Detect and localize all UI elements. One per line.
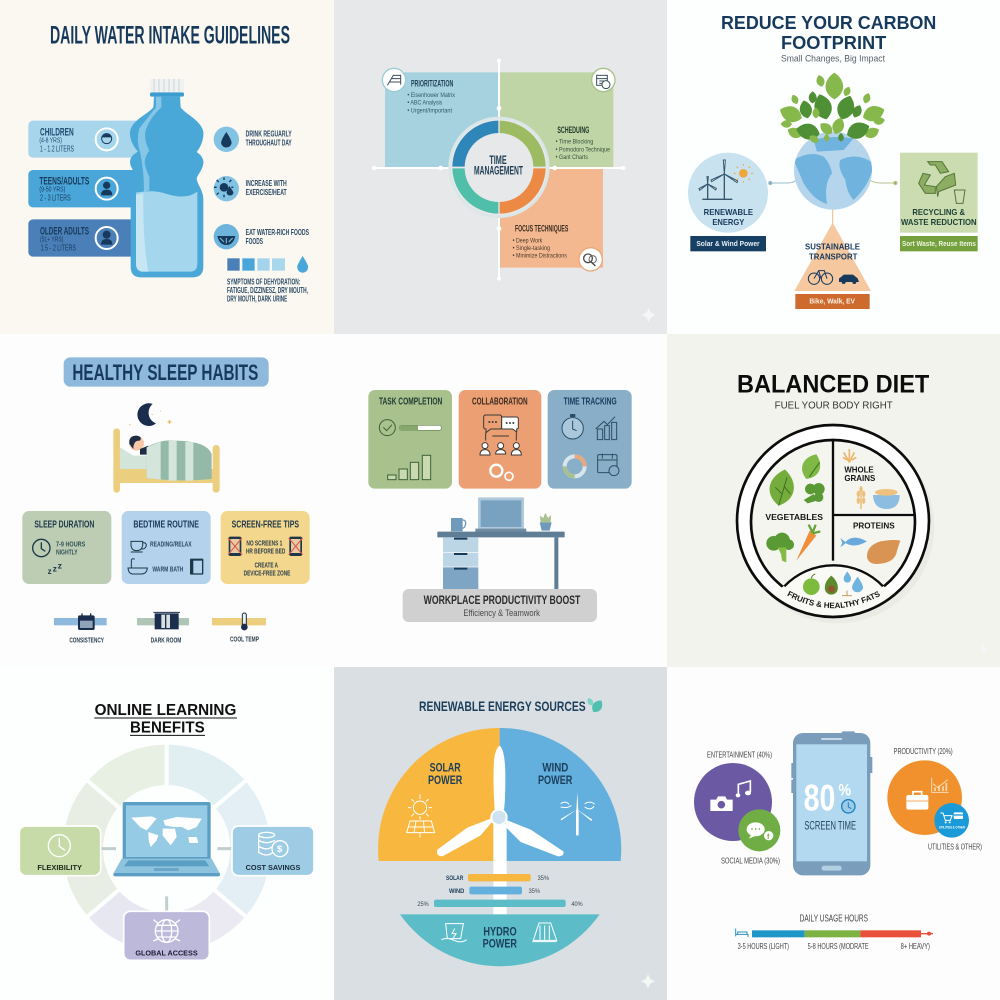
tip: consistency: CONSISTENCY <box>69 638 104 645</box>
chart: share bars: 25% <box>417 901 429 908</box>
text: symptoms of dehydration: DRY MOUTH, DARK URINE <box>227 294 288 304</box>
icon: laptop with world map <box>113 802 220 876</box>
chart: share bars: 35% <box>538 875 549 882</box>
chart: share bars: 35% <box>529 888 540 895</box>
card: bedtime routine: READING/RELAX <box>150 539 192 548</box>
panel: teens and adults <box>28 170 145 207</box>
panel: balanced diet <box>667 334 1000 667</box>
card: sustainable transport: TRANSPORT <box>809 252 857 262</box>
tip: water-rich foods: EAT WATER-RICH FOODS <box>246 227 309 237</box>
chart: segmented ring <box>61 743 273 955</box>
panel: reduce carbon footprint <box>667 0 1000 334</box>
tip: drink regularly <box>214 127 292 152</box>
panel: children: CHILDREN <box>40 126 74 138</box>
legend: colour swatches <box>227 256 308 273</box>
quadrant: scheduling: • Pomodoro Technique <box>556 146 610 153</box>
chart: entertainment: ENTERTAINMENT (40%) <box>707 749 772 759</box>
card: time tracking <box>548 390 632 489</box>
quadrant: focus techniques: FOCUS TECHNIQUES <box>515 224 568 234</box>
card: renewable energy: ENERGY <box>712 217 745 227</box>
chart: daily usage hours: 5-8 HOURS (MODRATE <box>808 941 869 951</box>
panel: older adults <box>28 219 145 257</box>
card: task completion <box>368 390 452 489</box>
section: fruits and healthy fats <box>787 572 880 608</box>
ring: time management: MANAGEMENT <box>474 164 523 178</box>
chart: social media: SOCIAL MEDIA (30%) <box>721 856 780 866</box>
section: whole grains: WHOLE <box>844 464 874 474</box>
icon: pyramid list <box>382 68 406 92</box>
chart: share bars: 40% <box>571 901 583 908</box>
section: whole grains: GRAINS <box>844 473 876 483</box>
quadrant: focus techniques: • Minimize Distractions <box>513 253 568 260</box>
icon: globe with leaves <box>777 73 887 210</box>
icon: smartphone with 80%: 80 <box>804 776 835 818</box>
tip: exercise and heat: INCREASE WITH <box>246 178 287 188</box>
icon: focus magnifier <box>579 248 602 271</box>
card: recycling and waste reduction <box>900 153 978 251</box>
card: recycling and waste reduction: RECYCLING & <box>912 207 965 217</box>
card: sleep duration: z <box>53 563 58 573</box>
quadrant: prioritization <box>385 72 499 167</box>
quadrant: prioritization: PRIORITIZATION <box>411 79 453 89</box>
icon: person sleeping in bed <box>113 428 220 493</box>
title: reduce your carbon footprint: REDUCE YOUR CARBON <box>721 12 936 33</box>
quadrant: scheduling: • Gant Charts <box>556 154 589 161</box>
quadrant: prioritization: • Eisenhower Matrix <box>407 92 456 99</box>
panel: older adults: OLDER ADULTS <box>40 225 89 237</box>
title: healthy sleep habits: HEALTHY SLEEP HABITS <box>72 360 258 385</box>
quadrant: scheduling: SCHEDUING <box>557 125 589 135</box>
title: reduce your carbon footprint: FOOTPRINT <box>781 32 886 53</box>
section: whole grains <box>843 449 900 509</box>
section: vegetables: VEGETABLES <box>765 512 823 522</box>
card: screen-free tips: DEVICE-FREE ZONE <box>244 568 290 577</box>
title: healthy sleep habits <box>64 357 269 387</box>
card: sleep duration: 7-9 HOURS <box>56 540 85 549</box>
tip: water-rich foods <box>214 224 309 249</box>
panel: older adults: (51+ YRS) <box>40 237 63 244</box>
tip: dark room <box>137 612 189 645</box>
watermark sparkle <box>979 644 989 654</box>
card: screen-free tips: NO SCREENS 1 <box>246 539 282 548</box>
icon: desk with laptop <box>437 497 565 589</box>
chart: utilities and other <box>928 803 982 852</box>
card: sleep duration: z <box>58 561 63 571</box>
section: wind power <box>500 728 621 861</box>
chart: share bars <box>417 874 583 908</box>
section: solar power: SOLAR <box>430 761 461 775</box>
panel: time management <box>334 0 668 334</box>
card: renewable energy <box>688 153 768 251</box>
card: flexibility <box>19 826 101 876</box>
section: hydro power: POWER <box>483 936 517 950</box>
tip: exercise and heat <box>214 176 287 201</box>
quadrant: focus techniques: • Single-tasking <box>513 245 550 252</box>
tip: cool temp <box>212 613 266 644</box>
section: proteins <box>840 520 900 564</box>
card: global access <box>124 911 209 960</box>
card: collaboration: COLLABORATION <box>472 397 528 408</box>
section: hydro power: HYDRO <box>483 924 517 938</box>
card: cost savings <box>232 826 314 876</box>
text: symptoms of dehydration: SYMPTOMS OF DEHYDRATION: <box>227 276 300 286</box>
panel: renewable energy sources <box>334 667 668 1000</box>
card: renewable energy: Solar & Wind Power <box>696 241 760 248</box>
banner: workplace productivity boost: WORKPLACE PRODUCTIVITY BOOST <box>424 593 581 607</box>
tip: drink regularly: THROUGHAUT DAY <box>246 137 292 147</box>
text: symptoms of dehydration: FATIGUE, DIZZINESZ, DRY MOUTH, <box>227 285 308 295</box>
ring: time management <box>450 118 548 217</box>
panel: children: 1 - 1.2 LITERS <box>40 145 74 154</box>
title: daily water intake guidelines: DAILY WATER INTAKE GUIDELINES <box>50 22 290 49</box>
title: online learning benefits: BENEFITS <box>130 719 205 736</box>
text: symptoms of dehydration <box>227 276 308 304</box>
chart: productivity: PRODUCTIVITY (20%) <box>894 746 953 756</box>
chart: productivity <box>887 746 962 835</box>
card: sleep duration: z <box>48 567 52 576</box>
section: solar power <box>378 728 500 861</box>
panel: teens and adults: (9-50 YRS) <box>39 187 65 194</box>
card: renewable energy: RENEWABLE <box>704 207 753 217</box>
section: wind power: WIND <box>542 761 568 775</box>
icon: central wind turbine <box>437 746 564 914</box>
quadrant: focus techniques <box>500 168 603 268</box>
card: sleep duration <box>22 511 111 584</box>
icon: connectors <box>769 179 897 227</box>
panel: online learning <box>0 667 334 1000</box>
quadrant: scheduling: • Time Blocking <box>556 138 594 145</box>
card: sleep duration: SLEEP DURATION <box>34 520 94 531</box>
watermark sparkle <box>641 974 655 989</box>
card: recycling and waste reduction: WASTE REDUCTION <box>901 217 977 227</box>
section: vegetables <box>765 451 825 562</box>
chart: daily usage hours <box>736 913 933 951</box>
icon: calendar clock <box>592 68 615 92</box>
tip: dark room: DARK ROOM <box>151 638 181 645</box>
title: balanced diet: BALANCED DIET <box>737 370 930 398</box>
card: bedtime routine: BEDTIME ROUTINE <box>133 520 199 531</box>
title: online learning benefits: ONLINE LEARNING <box>95 702 236 719</box>
tip: consistency <box>54 613 107 645</box>
panel: older adults: 1.5 - 2 LITERS <box>41 244 76 253</box>
panel: screen time <box>667 667 1000 1000</box>
chart: social media <box>721 809 780 866</box>
card: collaboration <box>459 390 541 489</box>
icon: smartphone with 80%: % <box>838 781 851 800</box>
card: sustainable transport <box>794 223 871 309</box>
section: fruits and healthy fats: FRUITS & HEALTHY FATS <box>787 590 880 608</box>
quadrant: prioritization: • Urgent/Important <box>407 107 452 114</box>
section: hydro power <box>400 914 600 966</box>
chart: daily usage hours: 3-5 HOURS (LIGHT) <box>738 941 789 951</box>
title: balanced diet: FUEL YOUR BODY RIGHT <box>775 401 893 412</box>
card: sleep duration: NIGHTLY <box>56 547 78 556</box>
panel: teens and adults: TEENS/ADULTS <box>39 175 89 187</box>
card: task completion: TASK COMPLETION <box>379 397 442 408</box>
panel: healthy sleep habits <box>0 334 334 668</box>
quadrant: focus techniques: • Deep Work <box>513 237 543 244</box>
title: reduce your carbon footprint: Small Changes, Big Impact <box>781 53 885 63</box>
tip: cool temp: COOL TEMP <box>230 637 259 644</box>
tip: drink regularly: DRINK REGUARLY <box>246 128 292 138</box>
card: bedtime routine <box>122 511 211 584</box>
card: screen-free tips: HR BEFORE BED <box>246 546 285 555</box>
panel: teens and adults: 2 - 3 LITERS <box>40 194 71 203</box>
quadrant: scheduling <box>500 72 613 167</box>
chart: share bars: WIND <box>449 888 464 895</box>
icon: moon and stars <box>129 403 172 426</box>
chart: social media: f <box>767 832 770 841</box>
panel: children: (4-8 YRS) <box>39 138 62 145</box>
axes <box>372 59 625 281</box>
icon: smartphone with 80% <box>791 731 872 875</box>
card: time tracking: TIME TRACKING <box>564 397 617 408</box>
tip: exercise and heat: EXERCISE/HEAT <box>246 187 287 197</box>
card: cost savings: COST SAVINGS <box>246 865 301 872</box>
card: flexibility: FLEXIBILITY <box>37 865 82 872</box>
quadrant: prioritization: • ABC Analysis <box>407 100 443 107</box>
card: sustainable transport: SUSTAINABLE <box>805 242 860 252</box>
chart: plate <box>736 424 930 618</box>
card: screen-free tips <box>221 511 310 584</box>
panel: workplace productivity <box>334 334 668 668</box>
card: cost savings: $ <box>277 844 283 854</box>
chart: daily usage hours: DAILY USAGE HOURS <box>800 913 868 924</box>
connectors <box>101 849 233 911</box>
chart: daily usage hours: 8+ HEAVY) <box>901 941 930 951</box>
chart: share bars: SOLAR <box>446 875 463 882</box>
panel: daily water intake <box>0 0 334 334</box>
section: solar power: POWER <box>428 773 462 787</box>
card: global access: GLOBAL ACCESS <box>135 950 198 957</box>
title: renewable energy sources: RENEWABLE ENERGY SOURCES <box>419 699 586 714</box>
card: bedtime routine: WARM BATH <box>152 564 183 573</box>
card: screen-free tips: CREATE A <box>255 561 278 570</box>
banner: workplace productivity boost <box>403 589 597 622</box>
title: balanced diet <box>737 370 930 412</box>
section: proteins: PROTEINS <box>853 520 895 530</box>
chart: entertainment <box>694 749 772 841</box>
watermark sparkle <box>641 308 656 322</box>
title: reduce your carbon footprint <box>721 12 936 63</box>
panel: children <box>28 121 145 158</box>
title: online learning benefits <box>94 702 237 736</box>
icon: water bottle <box>130 79 203 277</box>
card: screen-free tips: SCREEN-FREE TIPS <box>232 520 299 531</box>
ring: time management: TIME <box>489 153 507 167</box>
card: sustainable transport: Bike, Walk, EV <box>809 299 855 306</box>
banner: workplace productivity boost: Efficiency & Teamwork <box>463 608 540 618</box>
icon: smartphone with 80%: SCREEN TIME <box>804 819 856 833</box>
tip: water-rich foods: FOODS <box>246 236 263 246</box>
chart: utilities and other: UTILITIES & OTHER <box>939 825 965 829</box>
section: wind power: POWER <box>538 773 572 787</box>
card: recycling and waste reduction: Sort Waste, Reuse Items <box>902 241 976 248</box>
